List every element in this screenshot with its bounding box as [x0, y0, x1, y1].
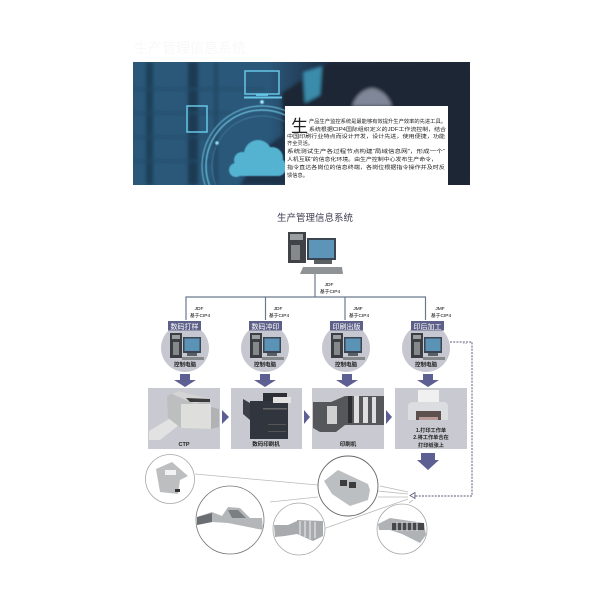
- protocol labels: JDF: [195, 306, 203, 312]
- panel: printer: 2.将工作单合在: [413, 433, 449, 441]
- station 3: plate making: 控制电脑: [335, 360, 357, 368]
- station 3: plate making: 印刷出版: [332, 322, 360, 331]
- machine circle: binder: [377, 504, 427, 554]
- intro text box: 指令直达各岗位的信息终端，各岗位根据指令操作并及时反: [287, 163, 445, 171]
- finishing connector lines: [195, 474, 413, 529]
- station 1: digital proofing: [161, 321, 209, 372]
- station 3: plate making: [322, 321, 370, 372]
- protocol labels: JMF: [353, 306, 363, 312]
- intro text box: 齐全灵活。: [287, 139, 313, 147]
- large down arrow: [417, 453, 439, 470]
- intro text box: 生: [291, 117, 308, 136]
- protocol labels: ···: [463, 342, 468, 347]
- panel: printer: [395, 388, 467, 449]
- protocol labels: 基于CIP4: [349, 312, 369, 319]
- down arrows: [174, 374, 439, 387]
- intro text box: 中国印刷行业特点而设计开发，设计先进，使用便捷，功能: [287, 132, 445, 140]
- protocol labels: JDF: [325, 282, 333, 288]
- protocol labels: 基于CIP4: [320, 288, 340, 295]
- machine circle: stitcher: [318, 456, 378, 516]
- machine circle: cutter: [146, 454, 194, 504]
- dashed feedback arrow: [410, 342, 472, 498]
- intro text box: 系统根据CIP4国际组织定义的JDF工作流控制，结合: [309, 125, 447, 133]
- protocol labels: 基于CIP4: [269, 312, 289, 319]
- icon: desktop monitor: [244, 71, 282, 98]
- station 4: post-press: 印后加工: [414, 322, 442, 331]
- protocol labels: [190, 282, 468, 347]
- panel: digital press: 数码印刷机: [252, 440, 280, 448]
- panel: printing press: 印刷机: [340, 440, 357, 448]
- protocol labels: 基于CIP4: [431, 312, 451, 319]
- side arrows: [222, 410, 392, 424]
- station 1: digital proofing: 数码打样: [170, 322, 198, 331]
- station 1: digital proofing: 控制电脑: [174, 360, 196, 368]
- station 4: post-press: 控制电脑: [415, 360, 437, 368]
- protocol labels: 基于CIP4: [190, 312, 210, 319]
- panel: printer: 1.打印工作单: [416, 426, 446, 434]
- intro text box: 馈信息。: [287, 171, 308, 179]
- station 4: post-press: [402, 321, 450, 372]
- panel: digital press: [231, 388, 302, 449]
- station 2: digital printing: 控制电脑: [254, 360, 276, 368]
- faint page heading: 生产管理信息系统: [134, 40, 246, 56]
- panel: printer: 打印纸张上: [418, 441, 444, 449]
- intro text box: [285, 106, 448, 185]
- intro text box: 产品生产监控系统是最能够有效提升生产效率的先进工具。: [309, 117, 446, 125]
- chart title: 生产管理信息系统: [277, 212, 353, 224]
- station 2: digital printing: 数码冲印: [252, 322, 280, 331]
- hero image panel: [133, 62, 470, 185]
- machine circle: folder: [196, 486, 264, 554]
- station 2: digital printing: [241, 321, 289, 372]
- machine circle: collator: [273, 503, 325, 555]
- icon: cloud: [229, 140, 286, 177]
- intro text box: 系统测试生产各过程节点构建“局域信息网”，形成一个“: [287, 147, 445, 155]
- icon: tablet: [187, 106, 207, 132]
- intro text box: 人机互联”的信息化环境。由生产控制中心发布生产命令，: [287, 155, 437, 163]
- panel: printing press: [312, 388, 384, 449]
- protocol labels: JMF: [435, 306, 445, 312]
- network rings: [200, 99, 285, 185]
- panel: CTP: [148, 388, 220, 449]
- panel: CTP: CTP: [178, 442, 190, 448]
- network connector lines: [186, 274, 426, 320]
- protocol labels: JDF: [274, 306, 282, 312]
- icon: central server computer: [288, 232, 343, 274]
